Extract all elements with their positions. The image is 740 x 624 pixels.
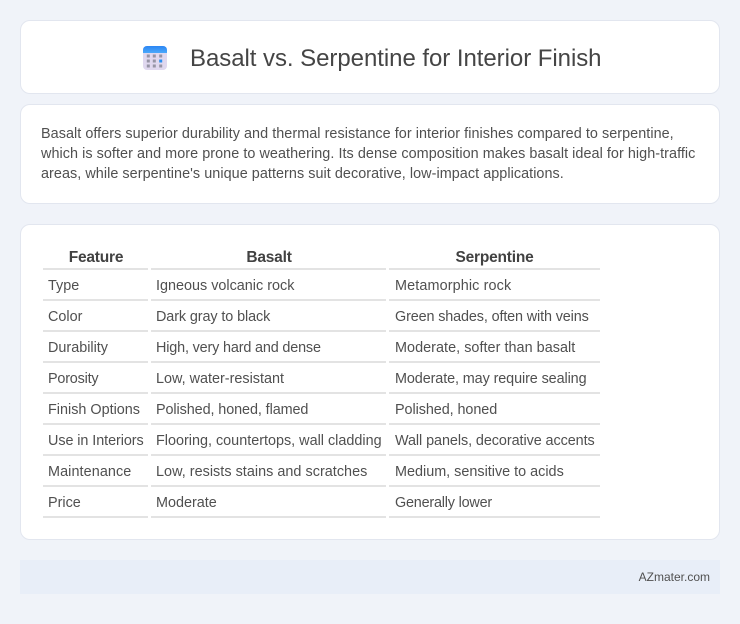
row: Type: Igneous volcanic rock	[156, 278, 294, 294]
row: Finish Options	[48, 402, 497, 418]
row: Maintenance	[48, 464, 564, 480]
row: Color: Color	[48, 309, 82, 325]
header: Serpentine: Serpentine	[455, 249, 534, 266]
comparison table	[43, 249, 600, 518]
row: Color: Dark gray to black	[156, 309, 270, 325]
row: Type: Type	[48, 278, 79, 294]
row: Porosity	[48, 371, 586, 387]
row: Type: Metamorphic rock	[395, 278, 511, 294]
row: Price	[48, 495, 492, 511]
row: Finish Options: Finish Options	[48, 402, 140, 418]
row: Durability: Durability	[48, 340, 108, 356]
row: Durability	[48, 340, 576, 356]
row: Type	[48, 278, 512, 294]
panel: comparison table	[20, 224, 720, 540]
title: Basalt vs. Serpentine for Interior Finish	[190, 45, 601, 72]
row: Porosity: Low, water-resistant	[156, 371, 284, 387]
footer bar	[20, 560, 720, 594]
row: Use in Interiors	[48, 433, 595, 449]
summary text: areas, while serpentine's unique patterns suit decorative, low-impact applications.	[41, 166, 564, 182]
row: Price: Price	[48, 495, 81, 511]
row: Use in Interiors: Wall panels, decorative accents	[395, 433, 595, 449]
icon: calendar	[143, 46, 167, 70]
row: Durability: Moderate, softer than basalt	[395, 340, 575, 356]
summary text	[41, 126, 695, 182]
row: Price: Moderate	[156, 495, 217, 511]
row: Porosity: Moderate, may require sealing	[395, 371, 586, 387]
row: Use in Interiors: Use in Interiors	[48, 433, 144, 449]
footer text: AZmater.com: AZmater.com	[639, 570, 710, 584]
row: Color: Green shades, often with veins	[395, 309, 589, 325]
row: Finish Options: Polished, honed, flamed	[156, 402, 308, 418]
row: Maintenance: Maintenance	[48, 464, 131, 480]
row: Finish Options: Polished, honed	[395, 402, 497, 418]
row: Porosity: Porosity	[48, 371, 98, 387]
summary text: Basalt offers superior durability and thermal resistance for interior finishes compared to serpentine,	[41, 126, 674, 142]
header: Feature: Feature	[69, 249, 123, 266]
header: Basalt: Basalt	[246, 249, 292, 266]
row: Maintenance: Medium, sensitive to acids	[395, 464, 564, 480]
panel: summary	[20, 104, 720, 204]
summary text: which is softer and more prone to weathering. Its dense composition makes basalt ideal for high-traffic	[41, 146, 695, 162]
row: Color	[48, 309, 589, 325]
row: Durability: High, very hard and dense	[156, 340, 321, 356]
row: Price: Generally lower	[395, 495, 492, 511]
row: Maintenance: Low, resists stains and scratches	[156, 464, 367, 480]
row: Use in Interiors: Flooring, countertops, wall cladding	[156, 433, 382, 449]
panel: title card	[20, 20, 720, 94]
